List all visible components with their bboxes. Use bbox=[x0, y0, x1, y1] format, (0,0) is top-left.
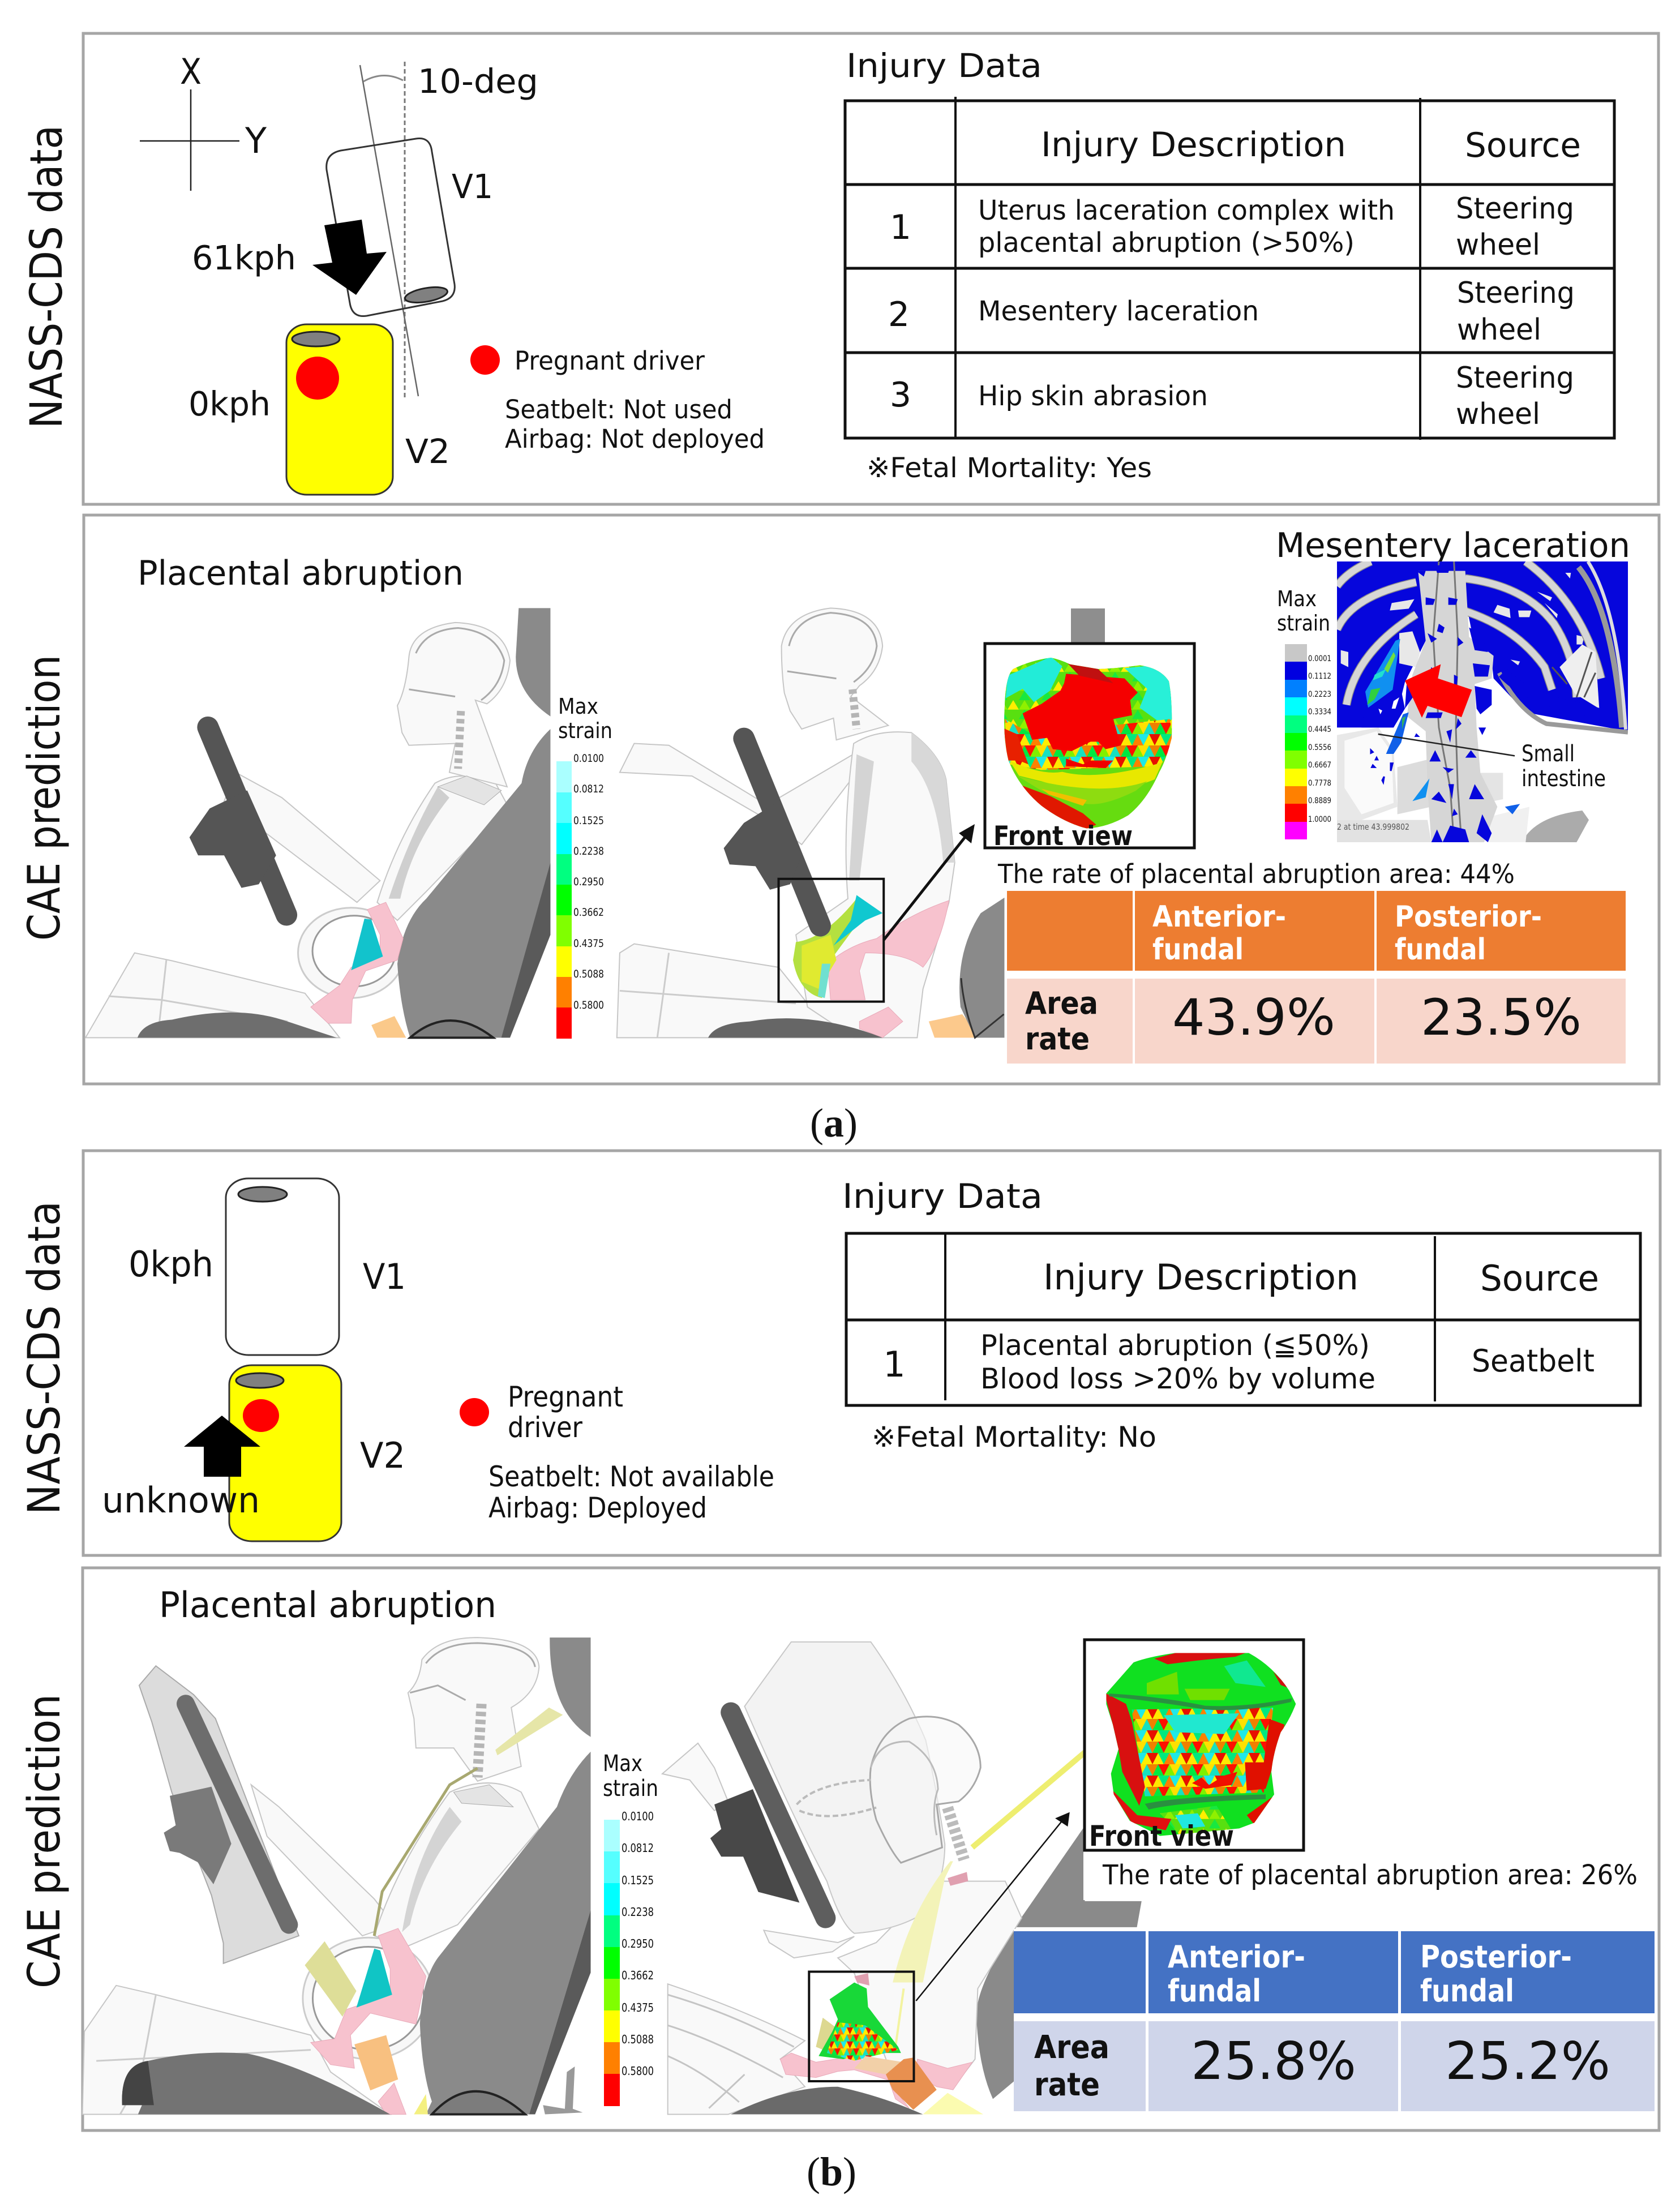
text: abruption area rate 44%: The rate of placental abruption area: 44% bbox=[997, 859, 1515, 889]
figure: mesentery strain render bbox=[1337, 561, 1628, 842]
axis diagram: X bbox=[180, 51, 202, 92]
figure: occupant model pre-impact bbox=[85, 608, 550, 1037]
label: 0kph: 0kph bbox=[128, 1244, 213, 1285]
table: injury data: Placental abruption (≦50%) bbox=[980, 1329, 1370, 1362]
legend: max strain: 0.2950 bbox=[622, 1937, 654, 1950]
table: injury data: 2 bbox=[888, 295, 910, 335]
legend: pregnant driver: Pregnant bbox=[508, 1380, 623, 1413]
table: injury data: Source bbox=[1465, 126, 1581, 165]
label: unknown: unknown bbox=[102, 1480, 260, 1521]
legend: max strain: 0.1525 bbox=[622, 1873, 654, 1887]
table: injury data: Steering bbox=[1456, 361, 1574, 395]
legend: max strain: 0.0100 bbox=[573, 752, 604, 765]
legend: mesentery max strain bbox=[1277, 586, 1331, 839]
table: orange area rate: fundal bbox=[1395, 933, 1486, 967]
heading: Placental abruption: Placental abruption bbox=[138, 554, 464, 593]
legend: max strain: 0.2238 bbox=[622, 1905, 654, 1919]
arrow: V1 direction bbox=[312, 220, 387, 295]
table: injury data: wheel bbox=[1456, 228, 1540, 262]
text: restraint status: Seatbelt: Not available bbox=[488, 1460, 774, 1493]
legend: mesentery max strain: strain bbox=[1277, 611, 1330, 636]
table: injury data bbox=[845, 97, 1614, 440]
table: blue area rate: fundal bbox=[1420, 1973, 1514, 2009]
legend: max strain: 0.5800 bbox=[622, 2064, 654, 2078]
table: blue area rate: fundal bbox=[1168, 1973, 1261, 2009]
heading: Injury Data: Injury Data bbox=[842, 1177, 1043, 1216]
legend: max strain: 0.5088 bbox=[622, 2033, 654, 2046]
heading: Injury Data: Injury Data bbox=[846, 46, 1042, 85]
vehicle V2 bbox=[229, 1365, 405, 1541]
table: blue area rate: Anterior- bbox=[1168, 1939, 1305, 1975]
vehicle V1: V1 bbox=[452, 167, 493, 206]
white label background bbox=[1083, 1850, 1655, 1900]
table: orange area rate: 43.9% bbox=[1172, 988, 1335, 1047]
angle indicator: 10-deg: 10-deg bbox=[418, 62, 538, 101]
table: injury data: 1 bbox=[890, 208, 911, 247]
legend: max strain: 0.4375 bbox=[573, 937, 604, 950]
table: orange area rate: 23.5% bbox=[1421, 988, 1582, 1047]
text: restraint status: Airbag: Not deployed bbox=[505, 424, 765, 454]
legend: pregnant driver: Pregnant driver bbox=[515, 346, 705, 376]
vehicle V1: V1 bbox=[363, 1256, 406, 1297]
vehicle V2: V2 bbox=[360, 1435, 405, 1476]
legend: max strain: 0.3662 bbox=[573, 906, 604, 919]
table: injury data: Mesentery laceration bbox=[978, 295, 1259, 327]
table: orange area rate: Posterior- bbox=[1395, 900, 1542, 934]
legend: max strain: 0.5800 bbox=[573, 999, 604, 1011]
table: injury data: Hip skin abrasion bbox=[978, 380, 1208, 412]
panel: case A CAE prediction bbox=[19, 515, 1659, 1084]
table: orange area rate: rate bbox=[1025, 1021, 1090, 1057]
legend: mesentery max strain: 0.7778 bbox=[1308, 779, 1331, 788]
panel: case B NASS-CDS data bbox=[19, 1151, 1660, 1555]
table: injury data: Steering bbox=[1456, 192, 1574, 226]
legend: mesentery max strain: 1.0000 bbox=[1308, 815, 1331, 824]
heading: CAE prediction: CAE prediction bbox=[19, 655, 70, 941]
legend: max strain: Max bbox=[603, 1751, 642, 1777]
inset: uterus front view: Front view bbox=[993, 821, 1133, 852]
vehicle V1 bbox=[226, 1178, 406, 1355]
legend: mesentery max strain: Max bbox=[1277, 586, 1317, 611]
legend: mesentery max strain: 0.4445 bbox=[1308, 725, 1331, 734]
legend: max strain: 0.0812 bbox=[573, 783, 604, 795]
table: injury data: wheel bbox=[1457, 313, 1541, 347]
table: injury data: wheel bbox=[1456, 397, 1540, 431]
label: 61kph: 61kph bbox=[192, 238, 296, 277]
axis diagram bbox=[140, 51, 267, 191]
legend: max strain: 0.2238 bbox=[573, 845, 604, 858]
text: restraint status bbox=[505, 395, 765, 454]
arrow: to front view inset bbox=[884, 824, 975, 940]
table: blue area rate: Area bbox=[1034, 2029, 1109, 2066]
text: restraint status: Seatbelt: Not used bbox=[505, 395, 732, 425]
legend: max strain bbox=[556, 694, 612, 1039]
table: blue area rate: 25.2% bbox=[1445, 2031, 1610, 2091]
inset: uterus front view bbox=[985, 644, 1194, 852]
table: orange area rate: Anterior- bbox=[1152, 900, 1286, 934]
legend: mesentery max strain: 0.1112 bbox=[1308, 672, 1331, 681]
table: injury data: Blood loss >20% by volume bbox=[980, 1362, 1375, 1395]
legend: max strain bbox=[603, 1751, 658, 2106]
legend: mesentery max strain: 0.8889 bbox=[1308, 796, 1331, 805]
table: blue area rate: Posterior- bbox=[1420, 1939, 1572, 1975]
table: blue area rate: 25.8% bbox=[1191, 2031, 1356, 2091]
legend: max strain: 0.2950 bbox=[573, 876, 604, 888]
vehicle V2: V2 bbox=[405, 432, 450, 471]
label: small intestine: intestine bbox=[1522, 766, 1606, 792]
legend: max strain: 0.3662 bbox=[622, 1969, 654, 1982]
axis diagram: Y bbox=[245, 120, 267, 161]
table: injury data: 3 bbox=[890, 375, 911, 415]
vehicle V2 bbox=[286, 324, 450, 495]
note: fetal mortality: ※Fetal Mortality: Yes bbox=[867, 452, 1152, 484]
legend: mesentery max strain: 0.6667 bbox=[1308, 761, 1331, 770]
label: 0kph: 0kph bbox=[188, 384, 271, 423]
heading: NASS-CDS data: NASS-CDS data bbox=[19, 1201, 70, 1515]
panel: case A NASS-CDS data bbox=[22, 33, 1658, 504]
inset: uterus front view bbox=[1085, 1640, 1304, 1853]
legend: mesentery max strain: 0.5556 bbox=[1308, 743, 1331, 752]
legend: max strain: 0.0812 bbox=[622, 1841, 654, 1855]
legend: mesentery max strain: 0.2223 bbox=[1308, 690, 1331, 699]
heading: Mesentery laceration: Mesentery laceration bbox=[1276, 526, 1630, 565]
table: injury data: 1 bbox=[883, 1344, 906, 1385]
table: injury data: Source bbox=[1480, 1258, 1599, 1299]
legend: max strain: 0.5088 bbox=[573, 968, 604, 980]
legend: max strain: 0.1525 bbox=[573, 814, 604, 827]
legend: max strain: 0.4375 bbox=[622, 2001, 654, 2014]
angle indicator: 10-deg bbox=[360, 62, 538, 398]
table: blue area rate: rate bbox=[1034, 2066, 1100, 2103]
table: orange area rate: Area bbox=[1025, 985, 1098, 1021]
seat headrest bbox=[1071, 608, 1105, 645]
table: injury data: Steering bbox=[1457, 276, 1575, 310]
legend: max strain: strain bbox=[558, 718, 612, 743]
legend: pregnant driver: driver bbox=[508, 1411, 582, 1444]
panel: case B CAE prediction bbox=[19, 1568, 1659, 2130]
figure: occupant model with airbag pre-impact bbox=[83, 1637, 591, 2115]
table: injury data: Uterus laceration complex with bbox=[978, 195, 1395, 226]
table: injury data bbox=[846, 1233, 1640, 1405]
table: orange area rate bbox=[1007, 891, 1626, 1064]
label: small intestine bbox=[1522, 741, 1606, 792]
table: injury data: Injury Description bbox=[1041, 125, 1346, 165]
table: injury data: Injury Description bbox=[1043, 1257, 1358, 1298]
legend: max strain: 0.0100 bbox=[622, 1810, 654, 1823]
note: fetal mortality: ※Fetal Mortality: No bbox=[872, 1421, 1156, 1454]
table: injury data: Seatbelt bbox=[1472, 1343, 1595, 1379]
legend: mesentery max strain: 0.0001 bbox=[1308, 654, 1331, 663]
heading: CAE prediction: CAE prediction bbox=[19, 1694, 70, 1988]
table: blue area rate bbox=[1014, 1929, 1656, 2115]
text: time stamp: 2 at time 43.999802 bbox=[1337, 822, 1409, 832]
text: restraint status: Airbag: Deployed bbox=[488, 1491, 707, 1524]
legend: mesentery max strain: 0.3334 bbox=[1308, 708, 1331, 717]
figure: occupant model with airbag at impact bbox=[662, 1642, 1142, 2115]
caption: (a): (a) bbox=[810, 1100, 858, 1146]
caption: (b): (b) bbox=[807, 2149, 856, 2194]
inset: uterus front view: Front view bbox=[1089, 1820, 1234, 1853]
text: abruption area rate 26%: The rate of placental abruption area: 26% bbox=[1102, 1859, 1638, 1891]
text: restraint status bbox=[488, 1460, 774, 1524]
legend: max strain: Max bbox=[558, 694, 598, 719]
figure: occupant model at impact bbox=[617, 608, 1004, 1037]
heading: NASS-CDS data: NASS-CDS data bbox=[22, 125, 72, 428]
label: small intestine: Small bbox=[1522, 741, 1575, 767]
table: orange area rate: fundal bbox=[1152, 933, 1244, 967]
table: injury data: placental abruption (>50%) bbox=[978, 227, 1355, 259]
heading: Placental abruption: Placental abruption bbox=[159, 1584, 496, 1626]
arrow: V2 direction bbox=[184, 1416, 260, 1477]
legend: pregnant driver bbox=[460, 1380, 623, 1444]
legend: max strain: strain bbox=[603, 1776, 658, 1802]
vehicle V1 bbox=[327, 138, 493, 316]
